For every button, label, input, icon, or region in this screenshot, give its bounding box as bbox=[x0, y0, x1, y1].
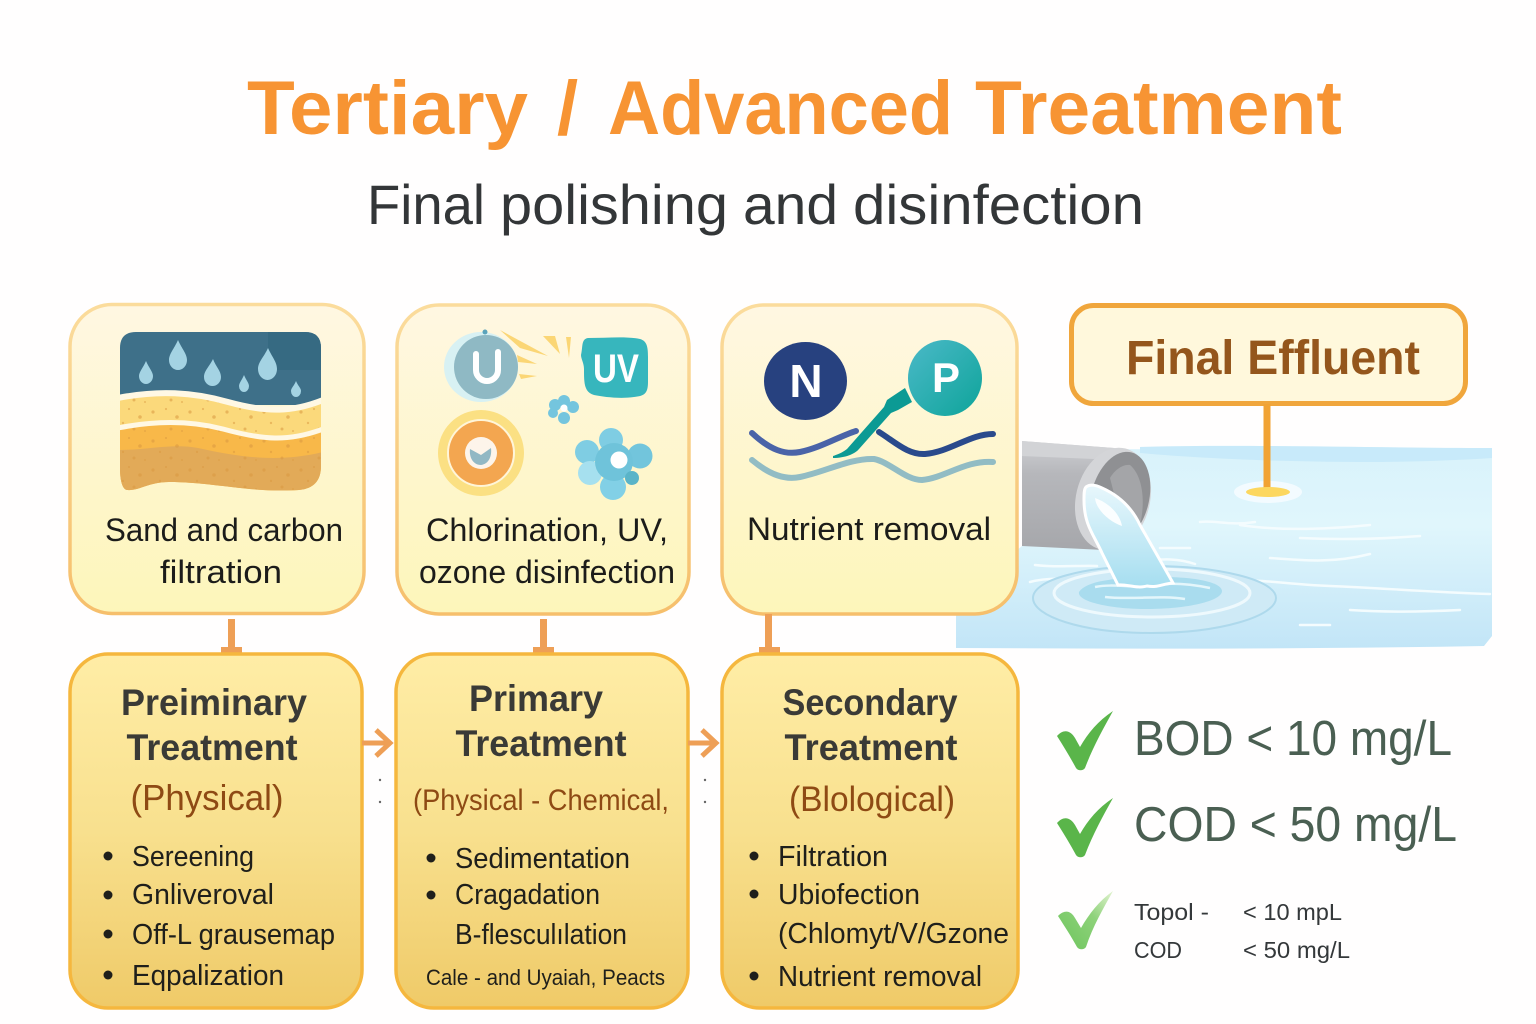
icon: sand filter layers with droplets bbox=[118, 330, 323, 497]
arrows: top to bottom bbox=[221, 614, 780, 654]
bullet list: B-flesculılation bbox=[455, 919, 627, 951]
checklist: COD: COD < 50 mg/L bbox=[1134, 798, 1457, 852]
bullet list: Filtration bbox=[778, 841, 888, 873]
bottom panel: primary treatment bbox=[396, 654, 688, 1008]
callout: final effluent bbox=[1072, 306, 1466, 497]
top panel: disinfection bbox=[397, 305, 689, 614]
checklist: BOD: BOD < 10 mg/L bbox=[1134, 712, 1452, 766]
bottom panel: primary treatment: (Physical - Chemical, bbox=[413, 784, 669, 817]
bottom panel: secondary treatment bbox=[722, 654, 1018, 1008]
checklist: additional limits: < 10 mpL bbox=[1243, 899, 1342, 925]
arrow: preliminary to primary bbox=[362, 730, 390, 756]
title: Advanced bbox=[608, 66, 953, 151]
bullet list: Gnliveroval bbox=[132, 879, 274, 911]
icon: N and P spheres with waves bbox=[752, 340, 993, 480]
icon: UV badge: UV bbox=[593, 347, 639, 391]
bullet list: Cragadation bbox=[455, 879, 600, 911]
callout: final effluent: Final Effluent bbox=[1126, 332, 1420, 385]
bullet list: Nutrient removal bbox=[778, 961, 982, 993]
bullet list: (Chlomyt/V/Gzone bbox=[778, 918, 1009, 950]
top panel: sand and carbon filtration: filtration bbox=[160, 554, 282, 590]
title: / bbox=[557, 66, 578, 151]
illustration: water with discharge pipe bbox=[956, 440, 1492, 649]
icon: large molecule bbox=[575, 428, 652, 500]
arrow: primary to secondary bbox=[688, 730, 716, 756]
bullet list: Sereening bbox=[132, 841, 254, 873]
top panel: disinfection: ozone disinfection bbox=[419, 554, 675, 590]
bullet list: Sedimentation bbox=[455, 843, 630, 875]
subtitle: and bbox=[743, 173, 838, 236]
subtitle: Final bbox=[367, 173, 485, 236]
icon: ozone disc bbox=[438, 410, 524, 496]
heading: Primary bbox=[469, 678, 603, 719]
label: Sand and carbon bbox=[105, 512, 343, 548]
water stream bbox=[1084, 485, 1173, 587]
label: Nutrient removal bbox=[747, 511, 991, 547]
bottom panel: secondary treatment: Treatment bbox=[784, 727, 958, 768]
icon: N and P spheres with waves: N bbox=[789, 355, 823, 407]
icon: sun rays bbox=[500, 330, 571, 379]
subtitle: polishing bbox=[500, 173, 728, 236]
checklist: additional limits: COD bbox=[1134, 937, 1182, 963]
icon: chlorine disc bbox=[444, 330, 518, 402]
bullet list bbox=[750, 841, 1009, 993]
icon: small molecule bbox=[548, 395, 579, 424]
bottom panel: preliminary treatment: Treatment bbox=[126, 727, 298, 768]
checklist: additional limits: < 50 mg/L bbox=[1243, 937, 1350, 963]
top panel: sand and carbon filtration bbox=[70, 304, 364, 614]
bottom panel: preliminary treatment bbox=[70, 654, 362, 1008]
checklist: additional limits bbox=[1058, 891, 1350, 963]
ripples bbox=[1033, 566, 1276, 633]
title: Tertiary bbox=[247, 66, 528, 151]
bottom panel: primary treatment: Treatment bbox=[456, 723, 626, 764]
bullet list: Off-L grausemap bbox=[132, 919, 335, 951]
decorative dots bbox=[379, 779, 706, 803]
bullet list: Cale - and Uyaiah, Peacts bbox=[426, 965, 665, 990]
label: Chlorination, UV, bbox=[426, 512, 668, 548]
checklist: BOD bbox=[1057, 711, 1452, 770]
bullet list bbox=[426, 843, 665, 990]
bottom panel: secondary treatment: (Blological) bbox=[789, 780, 955, 819]
icon: N and P spheres with waves: P bbox=[932, 354, 960, 401]
title: Treatment bbox=[975, 66, 1342, 151]
bullet list: Ubiofection bbox=[778, 879, 920, 911]
heading: Secondary bbox=[782, 682, 958, 723]
bullet list bbox=[104, 841, 335, 992]
pipe bbox=[1022, 440, 1161, 558]
heading: Preiminary bbox=[121, 682, 307, 723]
bullet list: Eqpalization bbox=[132, 960, 284, 992]
subtitle: disinfection bbox=[853, 173, 1144, 236]
top panel: nutrient removal bbox=[722, 305, 1017, 614]
bottom panel: preliminary treatment: (Physical) bbox=[130, 777, 284, 818]
icon: UV badge bbox=[581, 337, 648, 398]
checklist: additional limits: Topol - bbox=[1134, 899, 1209, 925]
